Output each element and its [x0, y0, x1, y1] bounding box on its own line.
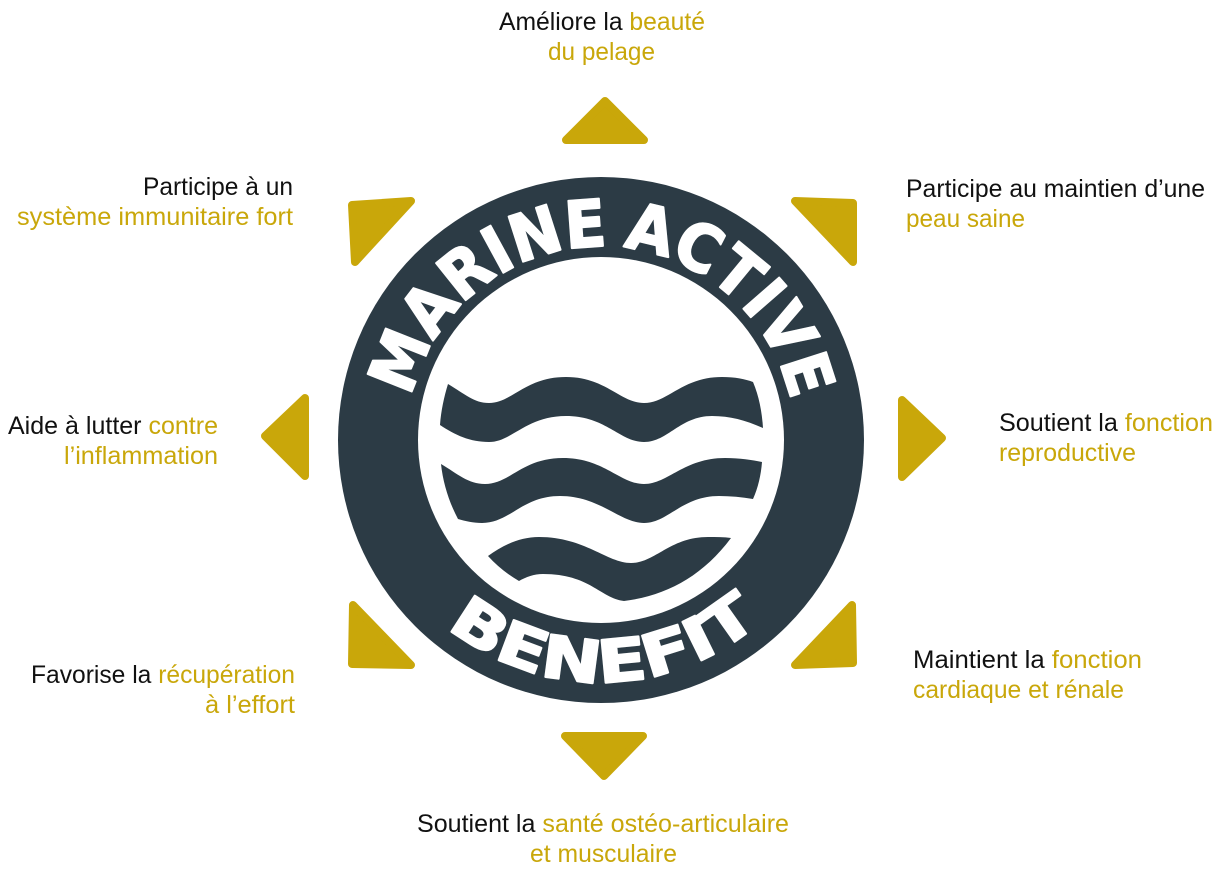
icon: waves — [440, 377, 763, 601]
text block: bottom left: Favorise la récupération — [31, 661, 295, 689]
badge title: MARINE ACTIVE: MARINE ACTIVE — [366, 198, 836, 398]
arrow: bottom — [565, 736, 643, 776]
text block: top — [499, 8, 705, 66]
text block: bottom left — [31, 661, 295, 719]
text block: right — [999, 409, 1213, 467]
text block: top right: peau saine — [906, 205, 1025, 233]
text block: left: Aide à lutter contre — [8, 412, 218, 440]
badge inner disc — [418, 257, 784, 623]
text block: bottom: Soutient la santé ostéo-articulaire — [417, 810, 789, 838]
text block: top: Améliore la beauté — [499, 8, 705, 36]
text block: top left: Participe à un — [143, 173, 293, 201]
text block: top right: Participe au maintien d’une — [906, 175, 1205, 203]
arrow: top right — [795, 201, 853, 262]
arrow: left — [265, 398, 305, 476]
text block: bottom: et musculaire — [530, 840, 677, 868]
text block: top left — [17, 173, 293, 231]
arrow: right — [902, 400, 942, 477]
text block: right: reproductive — [999, 439, 1136, 467]
arrow: top — [566, 101, 644, 140]
arrow: bottom right — [795, 605, 853, 665]
text block: top right — [906, 175, 1205, 233]
text block: top: du pelage — [548, 38, 655, 66]
text block: right: Soutient la fonction — [999, 409, 1213, 437]
text block: bottom right: Maintient la fonction — [913, 646, 1142, 674]
text block: left — [8, 412, 218, 470]
arrow: top left — [352, 201, 411, 262]
text block: bottom right: cardiaque et rénale — [913, 676, 1124, 704]
text block: top left: système immunitaire fort — [17, 203, 293, 231]
text block: bottom — [417, 810, 789, 868]
arrow: bottom left — [352, 605, 411, 665]
text block: bottom left: à l’effort — [205, 691, 295, 719]
badge ring — [338, 177, 864, 703]
badge subtitle: BENEFIT: BENEFIT — [450, 588, 748, 684]
central badge — [338, 177, 864, 703]
text block: bottom right — [913, 646, 1142, 704]
text block: left: l’inflammation — [64, 442, 218, 470]
